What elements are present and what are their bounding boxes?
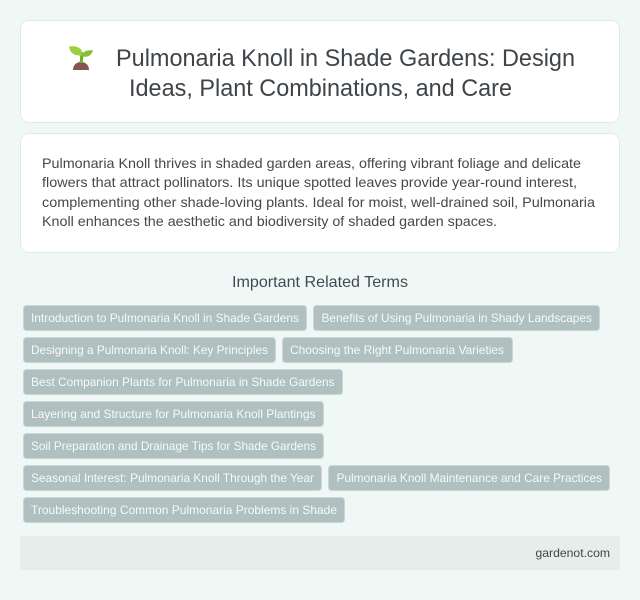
- tag: [282, 338, 512, 362]
- title text: [116, 45, 575, 102]
- tag: Best Companion Plants for Pulmonaria in Shade Gardens: [31, 375, 334, 389]
- heading: related terms: Important Related Terms: [232, 274, 408, 291]
- tag: [24, 370, 342, 394]
- tag: [314, 306, 600, 330]
- description text: Pulmonaria Knoll thrives in shaded garden areas, offering vibrant foliage and delicate: [42, 155, 581, 171]
- tag: Layering and Structure for Pulmonaria Knoll Plantings: [31, 407, 316, 421]
- footer: [20, 536, 620, 570]
- tag: [24, 402, 324, 426]
- tag: [24, 498, 344, 522]
- tag: [24, 306, 306, 330]
- description text: complementing other shade-loving plants. Ideal for moist, well-drained soil, Pulmonaria: [42, 194, 595, 210]
- description text: [42, 155, 595, 229]
- tag: Pulmonaria Knoll Maintenance and Care Practices: [336, 471, 602, 485]
- tag: [24, 466, 322, 490]
- tag: Seasonal Interest: Pulmonaria Knoll Through the Year: [31, 471, 314, 485]
- tag: Introduction to Pulmonaria Knoll in Shade Gardens: [31, 311, 299, 325]
- title text: Pulmonaria Knoll in Shade Gardens: Design: [116, 45, 575, 72]
- tag: [24, 338, 276, 362]
- icon: seedling: [69, 46, 93, 70]
- tag: Choosing the Right Pulmonaria Varieties: [290, 343, 504, 357]
- tag: Benefits of Using Pulmonaria in Shady Landscapes: [322, 311, 592, 325]
- tag: Soil Preparation and Drainage Tips for Shade Gardens: [31, 439, 316, 453]
- panel: related term tags: [24, 306, 610, 522]
- tag: [328, 466, 610, 490]
- description text: Knoll enhances the aesthetic and biodiversity of shaded garden spaces.: [42, 213, 497, 229]
- description text: flowers that attract pollinators. Its unique spotted leaves provide year-round interest,: [42, 174, 577, 190]
- tag: [24, 434, 324, 458]
- panel: title card: [20, 20, 620, 122]
- panel: description: [20, 134, 620, 252]
- footer source text: gardenot.com: [536, 546, 610, 560]
- tag: Troubleshooting Common Pulmonaria Problems in Shade: [31, 503, 337, 517]
- tag: Designing a Pulmonaria Knoll: Key Principles: [31, 343, 268, 357]
- title text: Ideas, Plant Combinations, and Care: [129, 75, 512, 102]
